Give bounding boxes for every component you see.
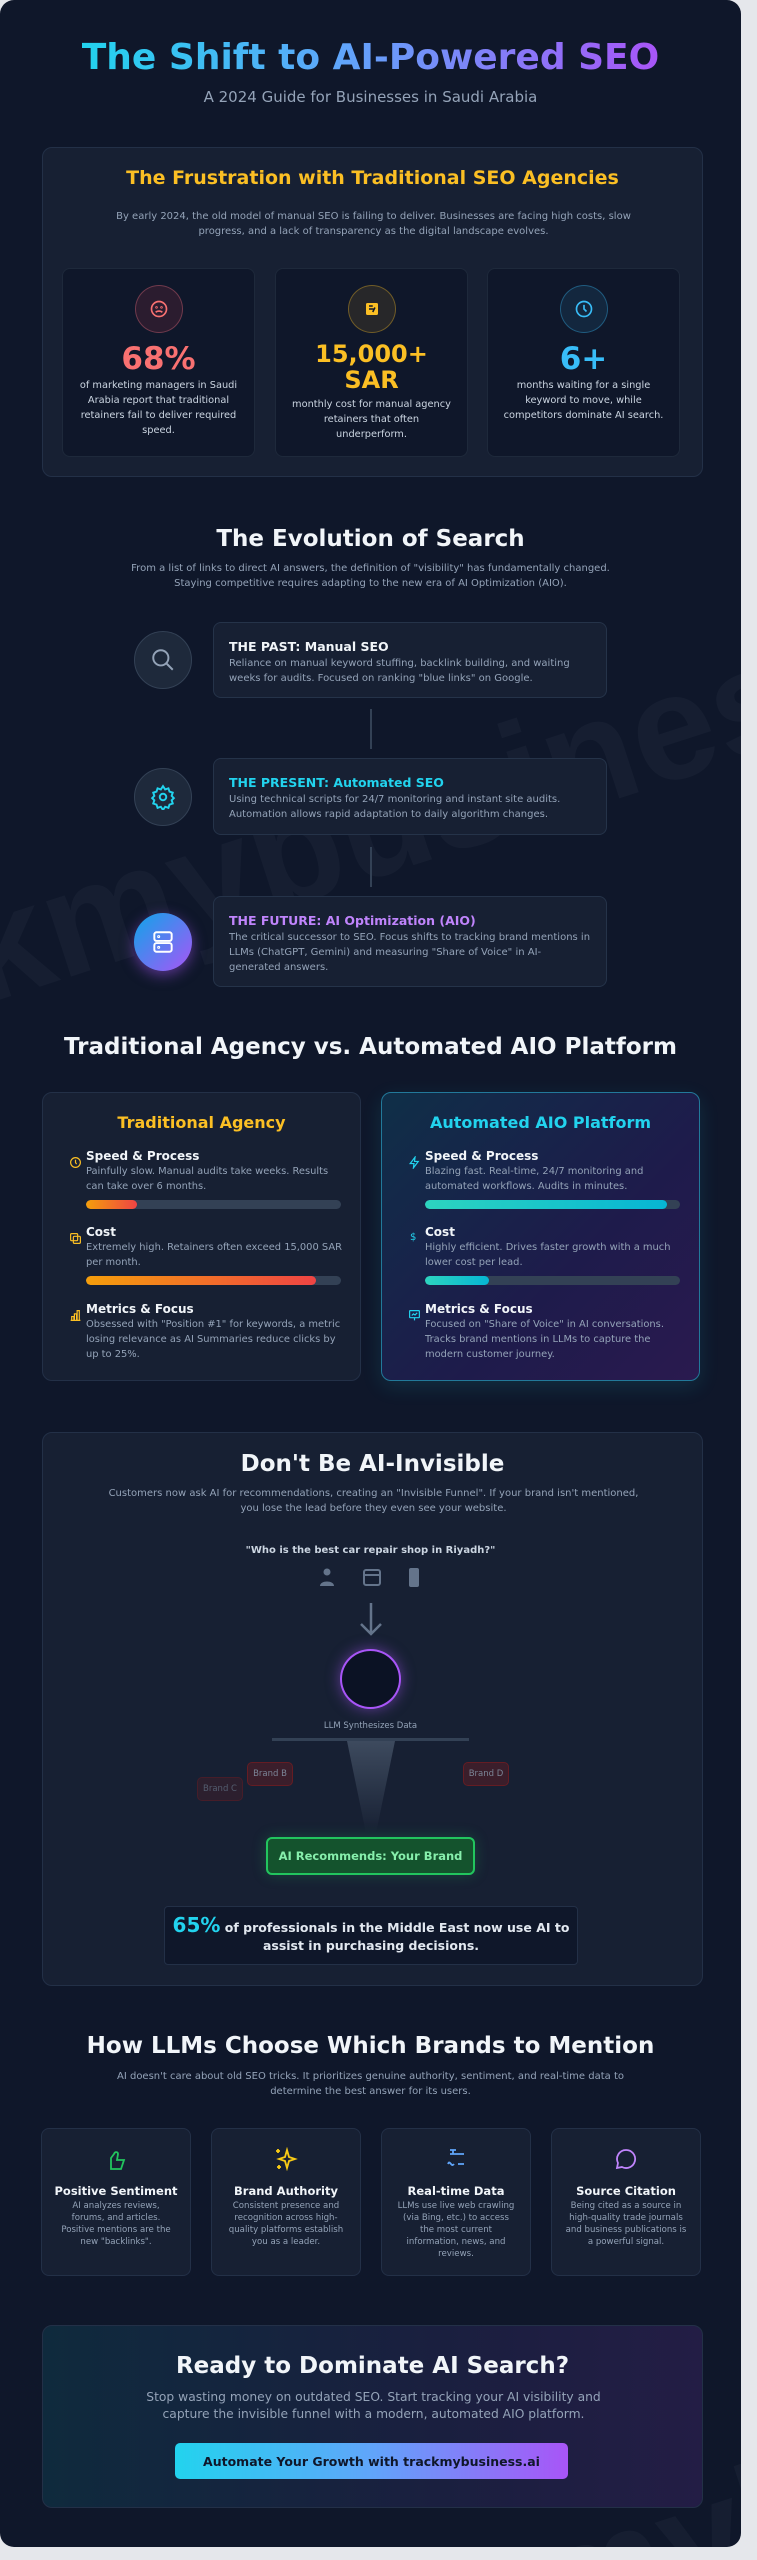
- item: metrics: [70, 1302, 340, 1360]
- item: cost: Cost: [425, 1225, 455, 1239]
- card: positive sentiment: Positive Sentiment: [54, 2184, 178, 2198]
- card: real-time data: LLMs use live web crawling (via Bing, etc.) to access the most current information, news, and reviews.: [398, 2201, 514, 2259]
- panel: traditional agency: Obsessed with "Position #1" for keywords, a metric losing relevance as AI Summaries reduce clicks by up to 25%.: [86, 1319, 340, 1360]
- stat card: 15,000+ SAR: [275, 268, 468, 457]
- number: 15,000+ SAR: SAR: [344, 366, 399, 394]
- card: past: Reliance on manual keyword stuffing, backlink building, and waiting weeks for audits. Focused on ranking "blue links" on Google.: [229, 658, 570, 684]
- item: speed: Speed & Process: [86, 1149, 199, 1163]
- card: source citation: Being cited as a source in high-quality trade journals and business publications is a powerful signal.: [566, 2201, 686, 2247]
- icon: clock: [560, 285, 608, 333]
- brand B: Brand B: [253, 1769, 287, 1779]
- card: real-time data: Real-time Data: [408, 2184, 504, 2198]
- card: positive sentiment: [41, 2128, 191, 2276]
- brand C: Brand C: [203, 1784, 237, 1794]
- item: speed: Speed & Process: [425, 1149, 538, 1163]
- icon: thumbs up: [110, 2151, 126, 2170]
- panel: automated AIO: Blazing fast. Real-time, 24/7 monitoring and automated workflows. Audits in minutes.: [425, 1166, 643, 1192]
- card: source citation: [551, 2128, 701, 2276]
- stat card: 6+: [487, 268, 680, 457]
- panel: traditional agency: Painfully slow. Manual audits take weeks. Results can take over 6 months.: [86, 1166, 328, 1192]
- heading: invisible: Don't Be AI-Invisible: [241, 1451, 504, 1477]
- heading: frustration: The Frustration with Traditional SEO Agencies: [126, 167, 619, 189]
- panel: frustration: [42, 147, 703, 477]
- icon: sad face: [135, 285, 183, 333]
- item: cost: [70, 1225, 342, 1285]
- heading: CTA: Ready to Dominate AI Search?: [176, 2353, 569, 2379]
- stat: 65%: 65% of professionals in the Middle East now use AI to assist in purchasing decisions.: [173, 1913, 569, 1953]
- panel: traditional agency: [42, 1092, 361, 1381]
- panel: CTA: [42, 2325, 703, 2508]
- icon: chat bubble: [616, 2149, 636, 2170]
- card: present: THE PRESENT: Automated SEO: [229, 775, 444, 790]
- button: CTA: Automate Your Growth with trackmybusiness.ai: [203, 2454, 540, 2468]
- card: past: [213, 622, 607, 698]
- item: cost: [410, 1225, 680, 1285]
- icon: money: [348, 285, 396, 333]
- brand D: Brand D: [469, 1769, 503, 1779]
- text: question: "Who is the best car repair shop in Riyadh?": [246, 1545, 495, 1556]
- icon: data stream: [447, 2149, 464, 2166]
- card: future: The critical successor to SEO. Focus shifts to tracking brand mentions in LLMs (ChatGPT, Gemini) and measuring "Share of Voice" in AI-generated answers.: [229, 932, 590, 973]
- heading: traditional: Traditional Agency: [117, 1113, 286, 1132]
- panel: AI invisible: [42, 1432, 703, 1986]
- icon: sparkles: [276, 2147, 298, 2171]
- card: brand authority: Consistent presence and recognition across high-quality platforms establish you as a leader.: [229, 2201, 343, 2247]
- panel: automated AIO: Highly efficient. Drives faster growth with a much lower cost per lead.: [425, 1242, 670, 1268]
- brand C: [197, 1777, 243, 1801]
- number: 15,000+ SAR: [315, 340, 428, 394]
- item: speed: [409, 1149, 680, 1209]
- text: months: months waiting for a single keyword to move, while competitors dominate AI search.: [504, 380, 663, 421]
- card: brand authority: [211, 2128, 361, 2276]
- text: 68%: of marketing managers in Saudi Arabia report that traditional retainers fail to deliver required speed.: [80, 380, 237, 436]
- label: LLM synthesizes: LLM Synthesizes Data: [324, 1721, 417, 1731]
- item: speed: [70, 1149, 341, 1209]
- item: metrics: Metrics & Focus: [425, 1302, 533, 1316]
- stat card: 68%: [62, 268, 255, 457]
- heading: comparison: Traditional Agency vs. Automated AIO Platform: [64, 1034, 677, 1060]
- item: metrics: Metrics & Focus: [86, 1302, 194, 1316]
- text: LLMs intro: AI doesn't care about old SEO tricks. It prioritizes genuine authority, sentiment, and real-time data to determine the best answer for its users.: [117, 2071, 624, 2096]
- brand B: [247, 1762, 293, 1786]
- heading: automated: Automated AIO Platform: [430, 1113, 651, 1132]
- text: invisible intro: Customers now ask AI for recommendations, creating an "Invisible Funnel". If your brand isn't mentioned, you lose the lead before they even see your website.: [109, 1488, 638, 1514]
- icon: search: [134, 631, 192, 689]
- icon: gear: [134, 768, 192, 826]
- funnel: [272, 1738, 469, 1816]
- card: present: [213, 758, 607, 835]
- card: present: Using technical scripts for 24/7 monitoring and instant site audits. Automation allows rapid adaptation to daily algorithm changes.: [229, 794, 560, 820]
- brand D: [463, 1762, 509, 1786]
- heading: evolution: The Evolution of Search: [216, 526, 525, 552]
- number: 15,000+ SAR: 15,000+: [315, 340, 428, 368]
- card: future: THE FUTURE: AI Optimization (AIO): [229, 913, 476, 928]
- title: The Shift to AI-Powered SEO: [82, 37, 659, 78]
- card: positive sentiment: AI analyzes reviews, forums, and articles. Positive mentions are the new "backlinks".: [61, 2201, 171, 2247]
- text: cost: monthly cost for manual agency retainers that often underperform.: [292, 399, 451, 440]
- arrow: down: [360, 1603, 382, 1636]
- callout: AI recommends: [266, 1837, 475, 1875]
- stat: 65%: [164, 1906, 578, 1965]
- icon: LLM orb: [340, 1649, 401, 1709]
- icons: user devices: [320, 1568, 419, 1587]
- panel: automated AIO: [381, 1092, 700, 1381]
- subtitle: A 2024 Guide for Businesses in Saudi Arabia: [204, 88, 537, 106]
- text: CTA: Stop wasting money on outdated SEO. Start tracking your AI visibility and capture the invisible funnel with a modern, automated AIO platform.: [146, 2390, 601, 2421]
- panel: automated AIO: Focused on "Share of Voice" in AI conversations. Tracks brand mentions in LLMs to capture the modern customer journey.: [425, 1319, 664, 1360]
- number: 68%: 68%: [121, 341, 196, 377]
- number: 6+: 6+: [560, 341, 607, 377]
- card: brand authority: Brand Authority: [234, 2184, 338, 2198]
- button: CTA: [175, 2443, 568, 2479]
- text: evolution intro: From a list of links to direct AI answers, the definition of "visibility" has fundamentally changed. Staying competitive requires adapting to the new era of AI Optimization (AIO).: [131, 563, 610, 588]
- text: frustration intro: By early 2024, the old model of manual SEO is failing to deliver. Businesses are facing high costs, slow progress, and a lack of transparency as the digital landscape evolves.: [116, 211, 631, 236]
- panel: automated AIO: $: [410, 1232, 416, 1243]
- heading: LLMs choose: How LLMs Choose Which Brands to Mention: [87, 2033, 654, 2059]
- item: cost: Cost: [86, 1225, 116, 1239]
- card: source citation: Source Citation: [576, 2184, 676, 2198]
- panel: traditional agency: Extremely high. Retainers often exceed 15,000 SAR per month.: [86, 1242, 342, 1268]
- card: real-time data: [381, 2128, 531, 2276]
- callout: AI recommends: AI Recommends: Your Brand: [279, 1849, 462, 1863]
- icon: server: [134, 913, 192, 971]
- card: past: THE PAST: Manual SEO: [229, 639, 389, 654]
- card: future: [213, 896, 607, 987]
- item: metrics: [409, 1302, 664, 1360]
